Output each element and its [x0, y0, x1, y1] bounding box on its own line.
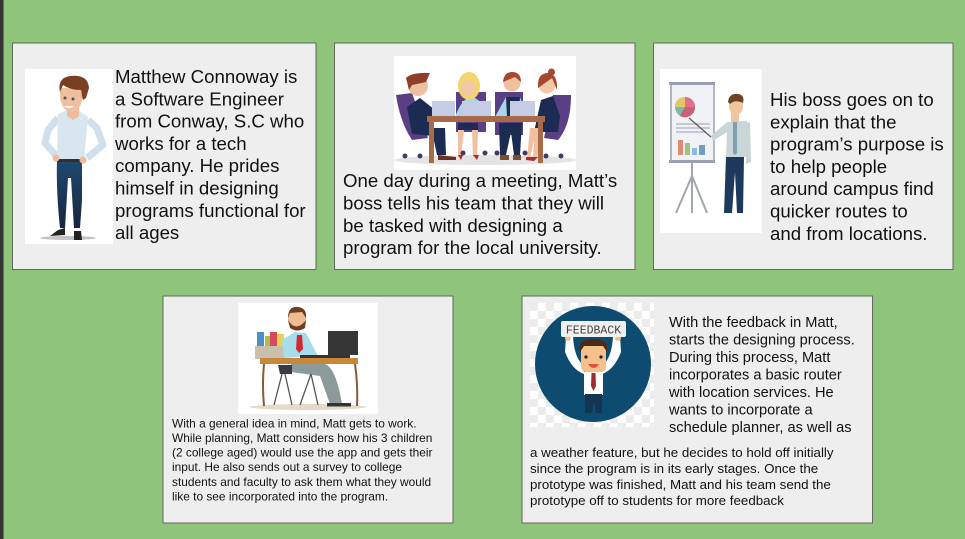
text: feedback, upper block: starts the designing process.	[669, 332, 855, 348]
text: feedback, upper block	[668, 315, 855, 436]
text: program purpose: around campus find	[770, 178, 934, 199]
text: Matthew introduction: from Conway, S.C who	[115, 111, 304, 132]
text: team meeting	[343, 170, 617, 258]
text: Matthew introduction: Matthew Connoway is	[115, 66, 297, 87]
icon: presenter with flip chart	[660, 69, 762, 233]
text: feedback, lower block	[530, 445, 834, 508]
text: feedback, upper block: With the feedback in Matt,	[669, 315, 838, 331]
icon: Matt working at a desk	[238, 303, 378, 414]
text: feedback, upper block: with location services. He	[668, 385, 834, 401]
text: feedback, lower block: since the program is in its early stages. Once the	[530, 461, 818, 476]
text: feedback, lower block: a weather feature, but he decides to hold off initially	[530, 445, 834, 460]
text: feedback, upper block: wants to incorporate a	[668, 402, 813, 418]
text: team meeting: One day during a meeting, Matt’s	[343, 170, 617, 191]
text: Matt gets to work: students and faculty to ask them what they would	[172, 475, 431, 489]
panel: program purpose	[654, 43, 953, 270]
panel: Matt gets to work	[163, 296, 453, 523]
text: Matthew introduction: all ages	[115, 222, 179, 243]
text: program purpose: His boss goes on to	[770, 89, 934, 110]
text: Matthew introduction: company. He prides	[115, 155, 279, 176]
text: program purpose	[770, 89, 944, 244]
text: feedback, lower block: prototype off to students for more feedback	[530, 493, 784, 508]
panel: feedback and prototype	[522, 296, 872, 523]
text: Matt gets to work: input. He also sends out a survey to college	[172, 460, 402, 474]
text: Matt gets to work	[172, 416, 432, 503]
text: Matt gets to work: like to see incorporated into the program.	[172, 489, 388, 503]
panel: Matthew introduction	[12, 43, 316, 270]
text: team meeting: program for the local university.	[343, 237, 602, 258]
text: feedback, lower block: prototype was finished, Matt and his team send the	[530, 477, 831, 492]
text: Matthew introduction	[114, 66, 306, 243]
text: team meeting: be tasked with designing a	[343, 215, 563, 236]
text: team meeting: boss tells his team that they will	[343, 192, 604, 213]
text: Matthew introduction: programs functional for	[115, 200, 306, 221]
text: Matt gets to work: While planning, Matt considers how his 3 children	[172, 431, 432, 445]
icon: team sitting around a meeting table	[394, 56, 576, 170]
text: feedback, upper block: During this process, Matt	[669, 350, 830, 366]
text: feedback, upper block: incorporates a basic router	[669, 368, 842, 384]
text: Matthew introduction: himself in designing	[115, 178, 279, 198]
text: Matt gets to work: (2 college aged) would use the app and gets their	[172, 446, 432, 460]
text: Matt gets to work: With a general idea in mind, Matt gets to work.	[172, 416, 417, 430]
panel: team meeting	[334, 43, 635, 270]
text: program purpose: to help people	[770, 156, 887, 177]
text: Matthew introduction: works for a tech	[114, 133, 247, 154]
text: Matthew introduction: a Software Engineer	[115, 88, 284, 109]
icon: character holding feedback sign	[530, 303, 654, 427]
text: program purpose: and from locations.	[770, 223, 928, 244]
label on the sign: FEEDBACK	[566, 324, 621, 338]
text: program purpose: program’s purpose is	[770, 134, 944, 155]
icon: Matthew standing character	[25, 69, 113, 244]
text: program purpose: explain that the	[770, 111, 896, 132]
text: feedback, upper block: schedule planner, as well as	[669, 420, 852, 436]
text: program purpose: quicker routes to	[770, 200, 908, 222]
